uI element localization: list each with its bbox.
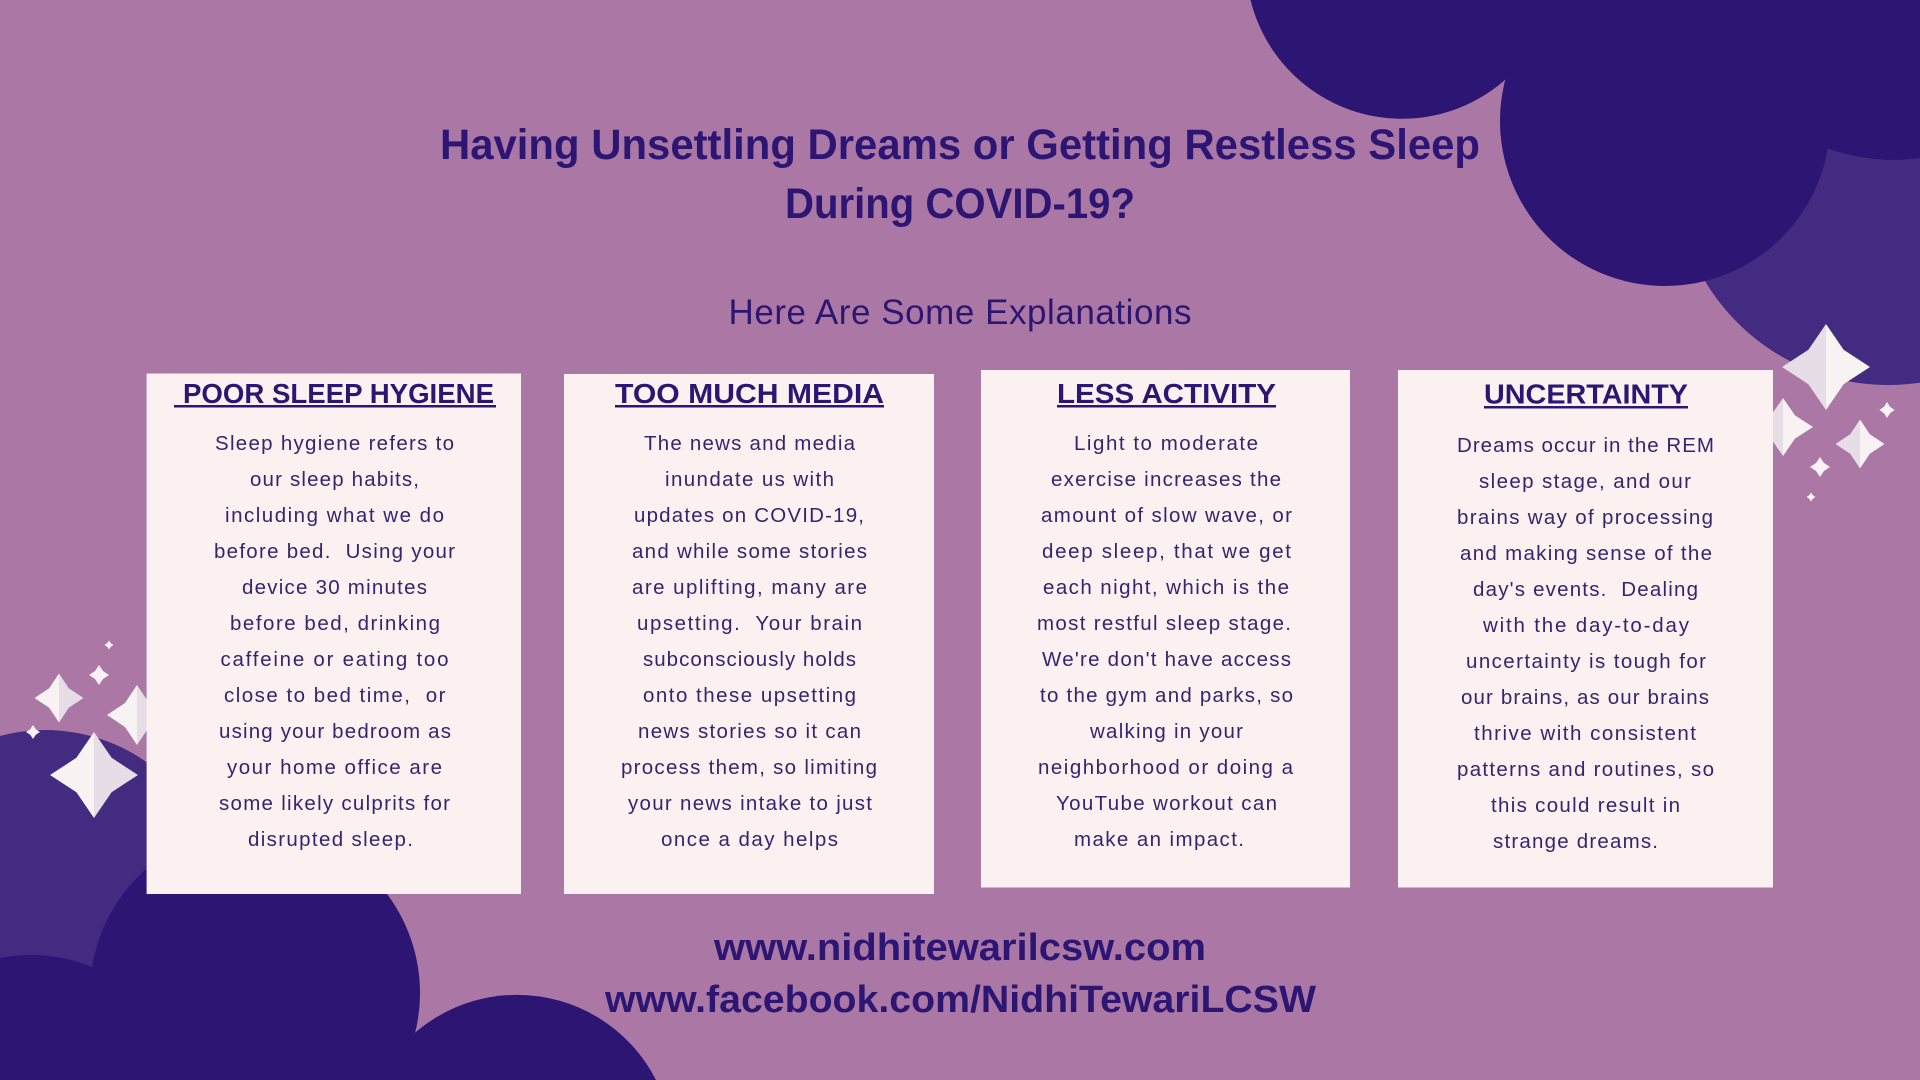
body text: uncertainty: and making sense of the xyxy=(1460,542,1712,565)
body text: less activity: amount of slow wave, or xyxy=(1041,504,1292,527)
footer links: www.facebook.com/NidhiTewariLCSW xyxy=(604,979,1316,1021)
body text: less activity: neighborhood or doing a xyxy=(1038,756,1294,779)
sparkles: top right xyxy=(1753,324,1894,502)
body text: too much media: process them, so limiting xyxy=(621,756,877,779)
body text: too much media: your news intake to just xyxy=(628,792,872,815)
title: Having Unsettling Dreams or Getting Restless Sleep xyxy=(440,121,1480,169)
body text: poor sleep hygiene: before bed, drinking xyxy=(230,612,440,635)
body text: uncertainty: sleep stage, and our xyxy=(1479,470,1691,493)
body text: uncertainty: this could result in xyxy=(1491,794,1680,817)
body text: poor sleep hygiene: some likely culprits for xyxy=(219,792,450,815)
body text: too much media: The news and media xyxy=(644,432,856,455)
body text: less activity: YouTube workout can xyxy=(1056,792,1277,815)
cloud: bottom left xyxy=(0,730,656,1080)
heading: less activity: LESS ACTIVITY xyxy=(1057,378,1276,409)
body text: too much media: once a day helps xyxy=(661,828,838,851)
body text: poor sleep hygiene: using your bedroom as xyxy=(219,720,451,743)
body text: uncertainty: brains way of processing xyxy=(1457,506,1713,529)
title xyxy=(440,121,1480,228)
body text: less activity: We're don't have access xyxy=(1042,648,1291,671)
body text: less activity: make an impact. xyxy=(1074,828,1244,851)
body text: less activity: each night, which is the xyxy=(1043,576,1289,599)
heading: too much media: TOO MUCH MEDIA xyxy=(615,378,884,409)
title: During COVID-19? xyxy=(785,180,1135,228)
body text: less activity: Light to moderate xyxy=(1074,432,1258,455)
heading: uncertainty: UNCERTAINTY xyxy=(1484,378,1688,410)
body text: too much media: inundate us with xyxy=(665,468,834,491)
body text: too much media: onto these upsetting xyxy=(643,684,856,707)
body text: less activity: most restful sleep stage. xyxy=(1037,612,1291,635)
body text: too much media xyxy=(621,432,877,851)
body text: less activity: deep sleep, that we get xyxy=(1042,540,1291,563)
body text: poor sleep hygiene: our sleep habits, xyxy=(250,468,419,491)
body text: poor sleep hygiene: device 30 minutes xyxy=(242,576,427,599)
body text: uncertainty: thrive with consistent xyxy=(1474,722,1696,745)
body text: uncertainty: day's events. Dealing xyxy=(1473,578,1698,601)
body text: poor sleep hygiene xyxy=(214,432,455,851)
body text: too much media: and while some stories xyxy=(632,540,867,563)
body text: uncertainty: uncertainty is tough for xyxy=(1466,650,1706,673)
body text: less activity xyxy=(1037,432,1294,851)
panel: too much media xyxy=(564,374,934,894)
body text: uncertainty: with the day-to-day xyxy=(1482,614,1690,637)
body text: uncertainty: strange dreams. xyxy=(1493,830,1658,853)
body text: too much media: upsetting. Your brain xyxy=(637,612,862,635)
footer links xyxy=(604,927,1316,1021)
subtitle: Here Are Some Explanations xyxy=(728,293,1192,332)
cloud: top right xyxy=(1250,0,1920,385)
body text: too much media: subconsciously holds xyxy=(643,648,856,671)
panel: poor sleep hygiene xyxy=(147,374,521,894)
body text: uncertainty: Dreams occur in the REM xyxy=(1457,434,1714,457)
sparkles: bottom left xyxy=(26,640,167,818)
body text: uncertainty xyxy=(1457,434,1714,853)
panel: less activity xyxy=(981,370,1350,888)
body text: poor sleep hygiene: your home office are xyxy=(227,756,442,779)
body text: poor sleep hygiene: disrupted sleep. xyxy=(248,828,413,851)
body text: too much media: updates on COVID-19, xyxy=(634,504,864,527)
heading: poor sleep hygiene: POOR SLEEP HYGIENE xyxy=(183,378,494,409)
body text: poor sleep hygiene: before bed. Using your xyxy=(214,540,455,563)
body text: poor sleep hygiene: including what we do xyxy=(225,504,444,527)
body text: uncertainty: our brains, as our brains xyxy=(1461,686,1709,709)
body text: less activity: exercise increases the xyxy=(1051,468,1281,491)
body text: too much media: news stories so it can xyxy=(638,720,861,743)
panel: uncertainty xyxy=(1398,370,1773,888)
body text: less activity: to the gym and parks, so xyxy=(1040,684,1293,707)
body text: uncertainty: patterns and routines, so xyxy=(1457,758,1714,781)
footer links: www.nidhitewarilcsw.com xyxy=(713,927,1206,969)
body text: poor sleep hygiene: close to bed time, or xyxy=(224,684,446,707)
body text: poor sleep hygiene: Sleep hygiene refers to xyxy=(215,432,454,455)
body text: less activity: walking in your xyxy=(1089,720,1243,743)
body text: too much media: are uplifting, many are xyxy=(632,576,867,599)
body text: poor sleep hygiene: caffeine or eating too xyxy=(220,648,448,671)
